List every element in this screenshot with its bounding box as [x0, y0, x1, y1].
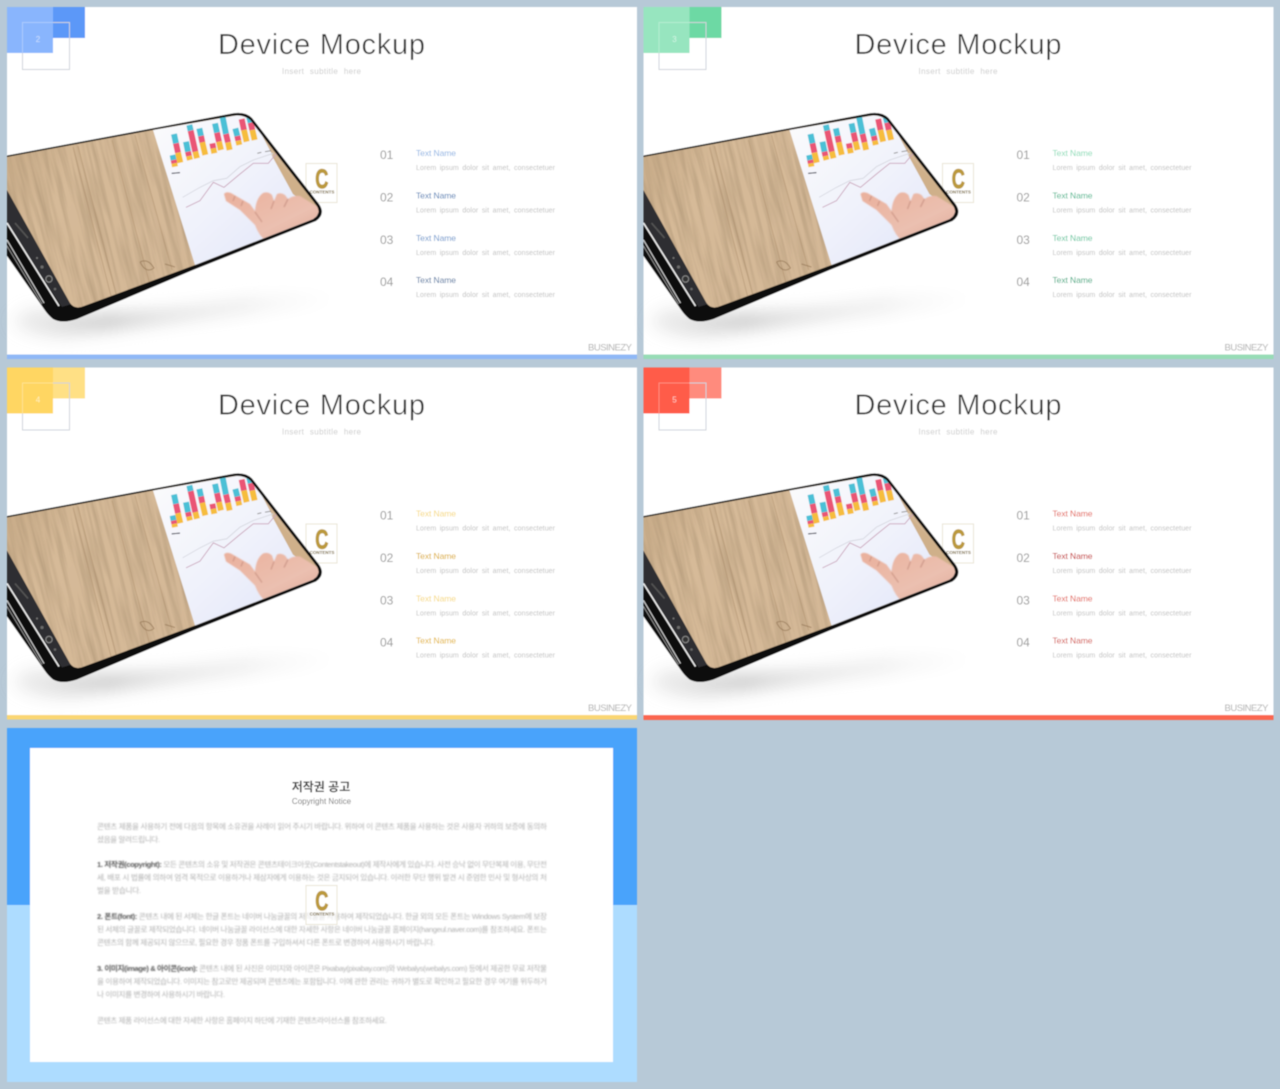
item 02: Text Name	[1052, 190, 1093, 200]
item 02	[380, 190, 556, 214]
logo watermark	[942, 524, 974, 563]
item 02	[1016, 190, 1192, 214]
item 04: Text Name	[416, 275, 456, 285]
list	[1016, 508, 1192, 660]
item 04: 04	[1016, 636, 1030, 650]
logo watermark: C	[315, 163, 328, 194]
corner squares: 4	[36, 396, 41, 404]
item 01: Text Name	[416, 508, 456, 518]
item 01: Text Name	[1052, 148, 1093, 158]
item 01: Text Name	[416, 148, 456, 158]
notice intro: 콘텐츠 제품을 사용하기 전에 다음의 항목에 소유권을 사례이 읽어 주시기 바랍니다. 위하여 이 콘텐츠 제품을 사용하는 것은 사용자 귀하의 보증에 동의하	[97, 821, 547, 831]
clause 2: font	[97, 911, 547, 947]
item 03: 03	[1016, 233, 1030, 247]
item 03	[1016, 594, 1192, 618]
corner squares	[7, 368, 85, 430]
item 01	[380, 148, 556, 172]
bottom accent bar	[644, 354, 1274, 359]
item 01: Text Name	[1052, 508, 1093, 518]
panel: copyright notice	[7, 728, 637, 1082]
item 03	[380, 594, 556, 618]
notice intro	[97, 821, 547, 844]
brand: BUSINEZY	[588, 703, 633, 714]
device mockup phone	[0, 79, 340, 380]
item 02: Text Name	[416, 190, 456, 200]
item 01: 01	[1016, 508, 1030, 522]
clause 2: font: 콘텐츠의 함께 제공되지 않으므로, 필요한 경우 정품 폰트를 구입하셔서 다른 폰트로 변경하여 사용하시기 바랍니다.	[97, 937, 435, 947]
item 03: Lorem ipsum dolor sit amet, consectetuer	[1052, 610, 1192, 618]
item 03: 03	[380, 594, 394, 608]
logo watermark	[306, 524, 337, 563]
logo watermark: CONTENTS	[946, 550, 971, 555]
logo watermark: CONTENTS	[310, 190, 334, 194]
title: Device Mockup	[218, 29, 425, 61]
clause 3: image and icon: 나 이미지를 변경하여 사용하시기 바랍니다.	[97, 989, 225, 999]
item 04	[380, 275, 556, 299]
item 03: Text Name	[416, 233, 456, 243]
list	[1016, 148, 1192, 299]
item 04: Lorem ipsum dolor sit amet, consectetuer	[416, 652, 556, 660]
corner squares	[644, 7, 722, 70]
clause 2: font: 된 서체의 글꼴로 제작되었습니다. 네이버 나눔글꼴 라이선스에 대한 자세한 사항은 네이버 나눔글꼴 홈페이지(hangeul.naver.com)를 참조하세요. 폰트는	[97, 924, 547, 934]
item 03	[380, 233, 556, 257]
corner squares: 5	[672, 396, 677, 404]
item 01: Lorem ipsum dolor sit amet, consectetuer	[416, 165, 556, 172]
item 02: Lorem ipsum dolor sit amet, consectetuer	[1052, 568, 1192, 575]
subtitle: Insert subtitle here	[918, 67, 998, 76]
item 04	[1016, 636, 1192, 660]
clause 1: copyright: 벌을 받습니다.	[97, 885, 141, 895]
item 01: 01	[1016, 148, 1030, 162]
bottom accent bar	[7, 354, 637, 359]
item 04: 04	[380, 636, 394, 650]
blue band background	[7, 728, 637, 1082]
item 02: Lorem ipsum dolor sit amet, consectetuer	[416, 568, 556, 575]
corner squares	[7, 7, 85, 70]
item 02: 02	[380, 190, 394, 204]
item 01: Lorem ipsum dolor sit amet, consectetuer	[1052, 526, 1192, 532]
item 01: 01	[380, 148, 394, 162]
clause 3: image and icon: 3. 이미지(image) & 아이콘(icon): 콘텐츠 내에 된 사진은 이미지와 아이콘은 Pixabay(pixabay.com)와 Webalys(webalys.com) 등에서 제공한 무료 저작물	[97, 963, 547, 973]
logo watermark: CONTENTS	[310, 550, 334, 555]
bottom accent bar	[644, 715, 1274, 720]
item 03: Text Name	[1052, 594, 1093, 604]
item 04: 04	[380, 275, 394, 289]
corner squares	[644, 368, 722, 430]
item 03: Lorem ipsum dolor sit amet, consectetuer	[416, 610, 556, 618]
item 04: Text Name	[1052, 275, 1093, 285]
brand: BUSINEZY	[1224, 342, 1269, 354]
item 03: Lorem ipsum dolor sit amet, consectetuer	[1052, 250, 1192, 257]
item 02	[1016, 551, 1192, 575]
item 04: Text Name	[416, 636, 456, 646]
clause 1: copyright: 세, 배포 시 법률에 의하여 엄격 목적으로 이용하거나 제삼자에게 이용하는 것은 금지되어 있습니다. 이러한 무단 행위 발견 시 준엄한 민사 및 형사상의 처	[97, 872, 547, 882]
notice intro: 셨음을 알려드립니다.	[97, 834, 160, 844]
item 04: Lorem ipsum dolor sit amet, consectetuer	[1052, 292, 1192, 299]
item 02: 02	[380, 551, 394, 565]
logo watermark	[306, 163, 337, 202]
item 04: Lorem ipsum dolor sit amet, consectetuer	[416, 292, 556, 299]
list	[380, 508, 556, 660]
corner squares: 3	[672, 35, 677, 44]
panel: slide 2 blue	[0, 7, 637, 380]
item 04: Text Name	[1052, 636, 1093, 646]
subtitle: Insert subtitle here	[918, 428, 998, 436]
brand: BUSINEZY	[1224, 703, 1269, 714]
panel: slide 4 yellow	[0, 368, 637, 741]
subtitle: Insert subtitle here	[282, 428, 362, 436]
list	[380, 148, 556, 299]
panel: slide 3 green	[574, 7, 1274, 380]
clause 1: copyright	[97, 859, 547, 895]
notice subheading: Copyright Notice	[292, 797, 352, 806]
clause 1: copyright: 1. 저작권(copyright): 모든 콘텐츠의 소유 및 저작권은 콘텐츠테이크아웃(Contentstakeout)에 제작사에게 있습니다. 사전 승낙 없이 무단복제 이용, 무단전	[97, 859, 547, 869]
logo watermark: C	[315, 885, 328, 916]
notice heading: 저작권 공고	[292, 779, 350, 794]
logo watermark: C	[952, 163, 965, 194]
item 03: Lorem ipsum dolor sit amet, consectetuer	[416, 250, 556, 257]
item 04: 04	[1016, 275, 1030, 289]
device mockup phone	[574, 79, 976, 380]
logo watermark	[306, 885, 337, 924]
device mockup phone	[574, 440, 976, 741]
item 03: Text Name	[1052, 233, 1093, 243]
item 01	[380, 508, 556, 532]
brand: BUSINEZY	[588, 342, 633, 354]
item 01: Lorem ipsum dolor sit amet, consectetuer	[1052, 165, 1192, 172]
title: Device Mockup	[854, 29, 1062, 61]
item 03: 03	[1016, 594, 1030, 608]
logo watermark: C	[952, 524, 965, 554]
clause 2: font: 2. 폰트(font): 콘텐츠 내에 된 서체는 한글 폰트는 네이버 나눔글꼴의 저작물을 사용하여 제작되었습니다. 한글 외의 모든 폰트는 Windows System에 보장	[97, 911, 547, 921]
logo watermark: C	[315, 524, 328, 554]
white card	[30, 748, 613, 1062]
bottom accent bar	[7, 715, 637, 720]
title: Device Mockup	[218, 390, 425, 422]
item 02: Text Name	[1052, 551, 1093, 561]
item 02: 02	[1016, 551, 1030, 565]
clause 3: image and icon: 을 이용하여 제작되었습니다. 이미지는 참고로만 제공되며 콘텐츠에는 포함됩니다. 이에 관한 권리는 귀하가 별도로 확인하고 필요한 경우 여기를 위두하거	[97, 976, 547, 986]
corner squares: 2	[36, 35, 41, 44]
item 03: Text Name	[416, 594, 456, 604]
item 04	[1016, 275, 1192, 299]
item 02: 02	[1016, 190, 1030, 204]
item 02: Lorem ipsum dolor sit amet, consectetuer	[416, 208, 556, 214]
clause 3: image and icon	[97, 963, 547, 999]
item 01	[1016, 148, 1192, 172]
title: Device Mockup	[854, 390, 1062, 422]
item 02: Text Name	[416, 551, 456, 561]
item 01: Lorem ipsum dolor sit amet, consectetuer	[416, 526, 556, 532]
logo watermark: CONTENTS	[946, 190, 971, 194]
item 04: Lorem ipsum dolor sit amet, consectetuer	[1052, 652, 1192, 660]
item 02: Lorem ipsum dolor sit amet, consectetuer	[1052, 208, 1192, 214]
item 01: 01	[380, 508, 394, 522]
panel: slide 5 red	[574, 368, 1274, 741]
item 03: 03	[380, 233, 394, 247]
logo watermark	[942, 163, 974, 202]
subtitle: Insert subtitle here	[282, 67, 362, 76]
notice closing line: 콘텐츠 제품 라이선스에 대한 자세한 사항은 홈페이지 하단에 기재한 콘텐츠라이선스를 참조하세요.	[97, 1015, 387, 1025]
item 03	[1016, 233, 1192, 257]
device mockup phone	[0, 440, 340, 741]
item 04	[380, 636, 556, 660]
logo watermark: CONTENTS	[310, 912, 334, 916]
item 02	[380, 551, 556, 575]
item 01	[1016, 508, 1192, 532]
